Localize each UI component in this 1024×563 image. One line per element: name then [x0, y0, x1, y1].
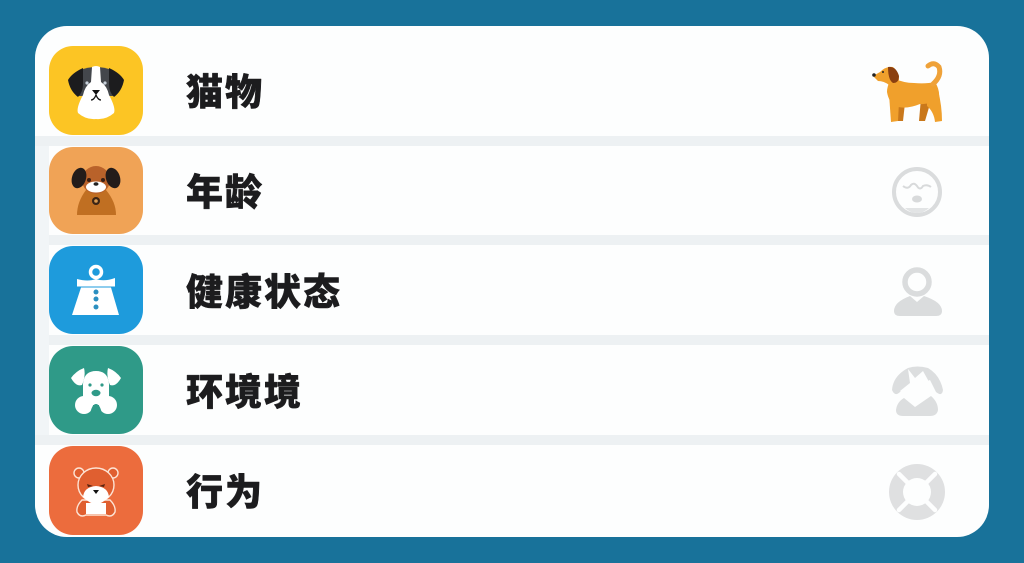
icon: orange bear tile: [49, 446, 143, 535]
label: 猫物: 猫物: [186, 72, 264, 113]
icon: grey face: [894, 169, 940, 215]
label: 年龄: 年龄: [186, 172, 264, 213]
icon: orange dog: [872, 64, 942, 122]
icon: orange dog tile: [49, 147, 143, 234]
row: 行为: [49, 446, 945, 535]
label: 健康状态: 健康状态: [186, 271, 342, 313]
icon: blue scale tile: [49, 246, 143, 334]
row: 环境境: [49, 346, 943, 434]
label: 行为: 行为: [186, 472, 264, 513]
icon: grey torn shape: [892, 366, 943, 416]
label: 环境境: 环境境: [186, 372, 303, 413]
row: 猫物: [49, 46, 942, 135]
icon: grey person: [894, 270, 942, 316]
row: 健康状态: [49, 246, 942, 334]
icon: grey lifebuoy: [889, 464, 945, 520]
row: 年龄: [49, 147, 940, 234]
icon: green dog tile: [49, 346, 143, 434]
icon: yellow dog tile: [49, 46, 143, 135]
